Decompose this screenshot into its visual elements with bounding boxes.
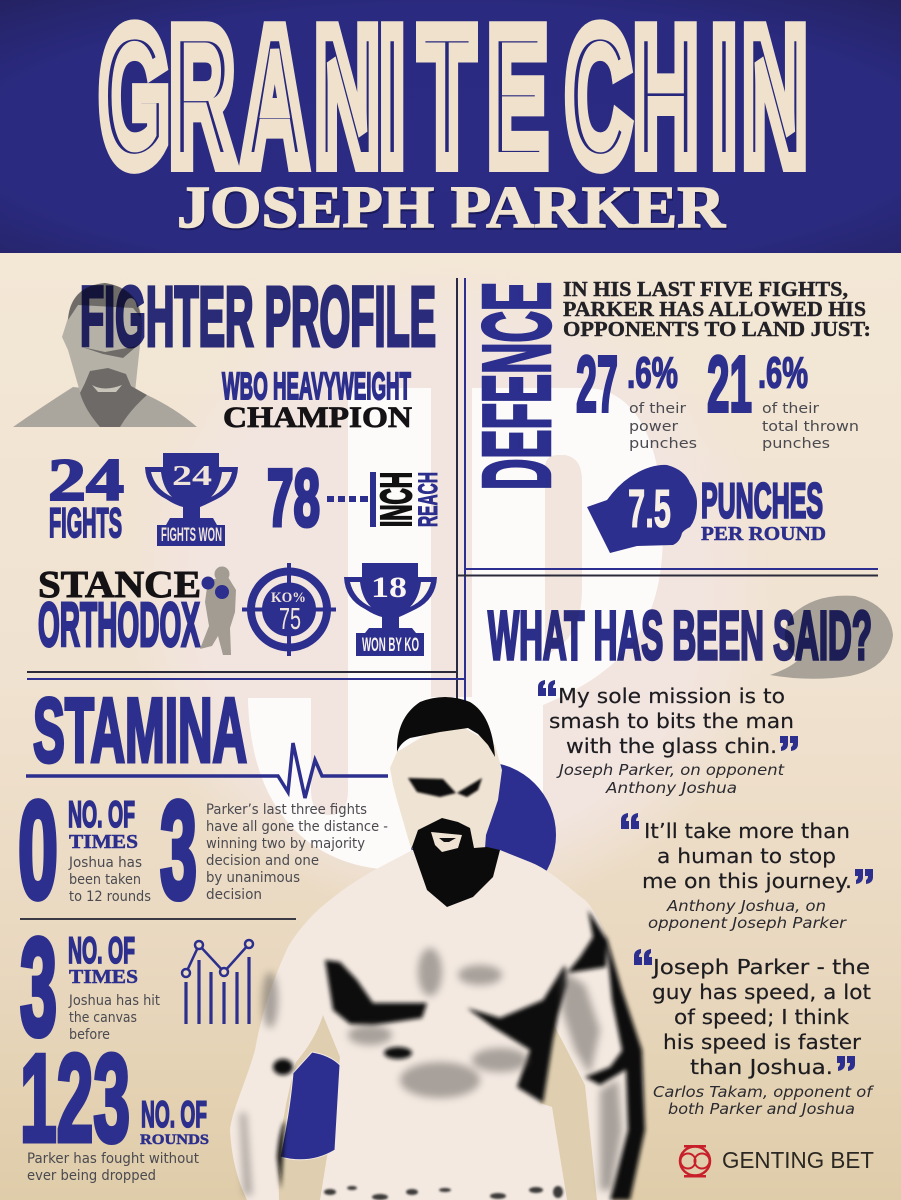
quote: Joseph Parker [538, 680, 798, 797]
stat: 3 times hit the canvas: TIMES [69, 966, 138, 988]
text: intro [563, 277, 871, 341]
icon: boxer silhouette [200, 566, 236, 655]
quote: Carlos Takam [634, 949, 875, 1118]
watermark: JP letters [248, 388, 663, 870]
stat: punches per round: PER ROUND [701, 524, 826, 545]
icon: trophy fights won: FIGHTS WON [161, 525, 222, 546]
stat: 27.6% power punches: 27 [576, 340, 618, 428]
stat: 3 times hit the canvas: before [69, 1027, 110, 1043]
quote: Anthony Joshua: Anthony Joshua, on [666, 897, 826, 915]
frame lines [27, 278, 878, 708]
quote: Carlos Takam: Carlos Takam, opponent of [653, 1083, 875, 1101]
stat: 21.6% total thrown punches: total thrown [762, 419, 859, 435]
text: title held: CHAMPION [223, 401, 412, 434]
blue circle behind fighter [410, 762, 556, 908]
icon: trophy won by KO: WON BY KO [362, 635, 419, 656]
stat: 0 times to 12 rounds: to 12 rounds [69, 889, 151, 905]
icon: line chart [182, 940, 253, 1024]
quote: Anthony Joshua: me on this journey. [642, 869, 852, 893]
stat: 21.6% total thrown punches: 21 [707, 340, 752, 428]
stat: 27.6% power punches: punches [629, 436, 697, 452]
hair [397, 697, 495, 757]
stat: 3 times hit the canvas [20, 910, 160, 1064]
stat: 21.6% total thrown punches: .6% [758, 348, 808, 398]
face [390, 720, 502, 905]
stat: 3 times hit the canvas: the canvas [69, 1010, 137, 1026]
stat: 3 last fights: decision and one [206, 853, 319, 869]
quote: Carlos Takam: of speed; I think [674, 1005, 849, 1029]
panel: fighter profile [13, 270, 443, 660]
quote: Joseph Parker: Anthony Joshua [605, 779, 737, 797]
subtitle: JOSEPH PARKER [177, 174, 727, 240]
soft arm and abdominal tones [240, 948, 622, 1195]
panel: fighter profile: ORTHODOX [38, 591, 200, 660]
stat: 0 times to 12 rounds: been taken [69, 872, 141, 888]
body [230, 850, 643, 1200]
quote: Anthony Joshua: It’ll take more than [644, 819, 850, 843]
stat: 3 times hit the canvas: 3 [20, 910, 57, 1064]
stat: 27.6% power punches [576, 340, 697, 452]
icon: boxing glove with 7.5 [587, 465, 697, 553]
panel: fighter profile: FIGHTS [49, 499, 122, 546]
text: intro: IN HIS LAST FIVE FIGHTS, [563, 277, 848, 301]
stat: 24 fights: 24 [48, 447, 124, 513]
stat: 78 inch reach: INCH [372, 472, 421, 527]
stat: 27.6% power punches: .6% [627, 348, 678, 398]
logo: Genting Bet [680, 1145, 874, 1178]
icon: KO target: 75 [279, 601, 301, 636]
stat: 0 times to 12 rounds: 0 [18, 774, 58, 928]
quote: Carlos Takam: Joseph Parker - the [651, 955, 870, 979]
quote: Carlos Takam: his speed is faster [663, 1030, 862, 1054]
icon: KO target [242, 563, 336, 656]
quote: Carlos Takam: guy has speed, a lot [652, 980, 871, 1004]
stat: 78 inch reach: REACH [413, 472, 443, 527]
text: DEFENCE [464, 282, 570, 490]
eyes [408, 778, 482, 797]
heading: stamina: STAMINA [33, 680, 247, 782]
stat: stance orthodox: STANCE [38, 564, 201, 606]
shadows [273, 910, 645, 1200]
panel: fighter profile: WBO HEAVYWEIGHT [222, 366, 411, 408]
stat: 21.6% total thrown punches [707, 340, 859, 452]
stat: 3 last fights [160, 774, 388, 928]
quote: Joseph Parker: My sole mission is to [558, 684, 785, 708]
stat: 3 last fights: Parker’s last three fights [206, 802, 367, 818]
quote: Joseph Parker: with the glass chin. [566, 734, 777, 758]
stat: 21.6% total thrown punches: of their [762, 401, 819, 417]
stat: 123 rounds: Parker has fought without [27, 1151, 199, 1167]
stat: 3 times hit the canvas: NO. OF [68, 930, 135, 971]
stat: 27.6% power punches: power [629, 419, 678, 435]
quote: Joseph Parker: Joseph Parker, on opponent [556, 761, 785, 779]
icon: trophy fights won: 24 [172, 461, 212, 492]
quote: Anthony Joshua [621, 813, 873, 932]
icon: trophy won by KO: 18 [371, 571, 407, 604]
header banner [0, 0, 901, 253]
stat: 123 rounds: NO. OF [141, 1094, 207, 1135]
mouth [431, 832, 462, 852]
stat: punches per round [701, 474, 826, 545]
quote: Carlos Takam: than Joshua. [690, 1055, 833, 1079]
blue circle segment [280, 1052, 340, 1160]
panel: what has been said [488, 596, 893, 1118]
icon: boxing glove with 7.5: 7.5 [628, 479, 671, 539]
page background [0, 252, 901, 1200]
stat: 3 times hit the canvas: Joshua has hit [68, 993, 160, 1009]
stat: 21.6% total thrown punches: punches [762, 436, 830, 452]
quote: Carlos Takam: both Parker and Joshua [668, 1100, 855, 1118]
trunks band [324, 1186, 563, 1200]
icon: KO target: KO% [271, 590, 306, 606]
stat: 0 times to 12 rounds: Joshua has [68, 855, 142, 871]
quote: Anthony Joshua: a human to stop [657, 844, 836, 868]
text: title held [222, 366, 412, 434]
text: FIGHTER PROFILE [80, 270, 436, 364]
beard [412, 818, 500, 907]
panel: defence [464, 277, 871, 553]
stat: 0 times to 12 rounds [18, 774, 151, 928]
text: intro: OPPONENTS TO LAND JUST: [563, 317, 871, 341]
icon: speech bubble [770, 596, 893, 679]
icon: trophy won by KO [344, 563, 437, 656]
stat: 123 rounds: ROUNDS [140, 1132, 209, 1148]
text: intro: PARKER HAS ALLOWED HIS [563, 297, 866, 321]
stat: stance orthodox [38, 564, 201, 660]
illustration: Joseph Parker [230, 697, 645, 1200]
stat: 78 inch reach: 78 [267, 454, 320, 544]
stat: 3 last fights: 3 [160, 774, 197, 928]
quote: Anthony Joshua: opponent Joseph Parker [648, 914, 847, 932]
quote: Joseph Parker: smash to bits the man [549, 709, 794, 733]
panel: stamina [18, 680, 388, 1184]
stat: 123 rounds: 123 [20, 1030, 130, 1168]
stat: 0 times to 12 rounds: NO. OF [68, 794, 135, 835]
stat: 0 times to 12 rounds: TIMES [69, 831, 138, 853]
icon: trophy fights won [145, 453, 238, 546]
gaps between arms and torso [278, 1015, 597, 1200]
stat: 3 last fights: have all gone the distance - [206, 819, 388, 835]
icon: fighter portrait [13, 283, 197, 427]
stat: 24 fights [48, 447, 124, 546]
stat: 3 last fights: by unanimous [206, 870, 300, 886]
logo: Genting Bet: GENTING BET [722, 1147, 874, 1173]
stat: 3 last fights: winning two by majority [206, 836, 365, 852]
icon: heartbeat line [26, 743, 388, 798]
stat: 78 inch reach [267, 454, 443, 544]
stat: 27.6% power punches: of their [629, 401, 686, 417]
stat: 123 rounds: ever being dropped [27, 1168, 156, 1184]
stat: 3 last fights: decision [206, 887, 262, 903]
